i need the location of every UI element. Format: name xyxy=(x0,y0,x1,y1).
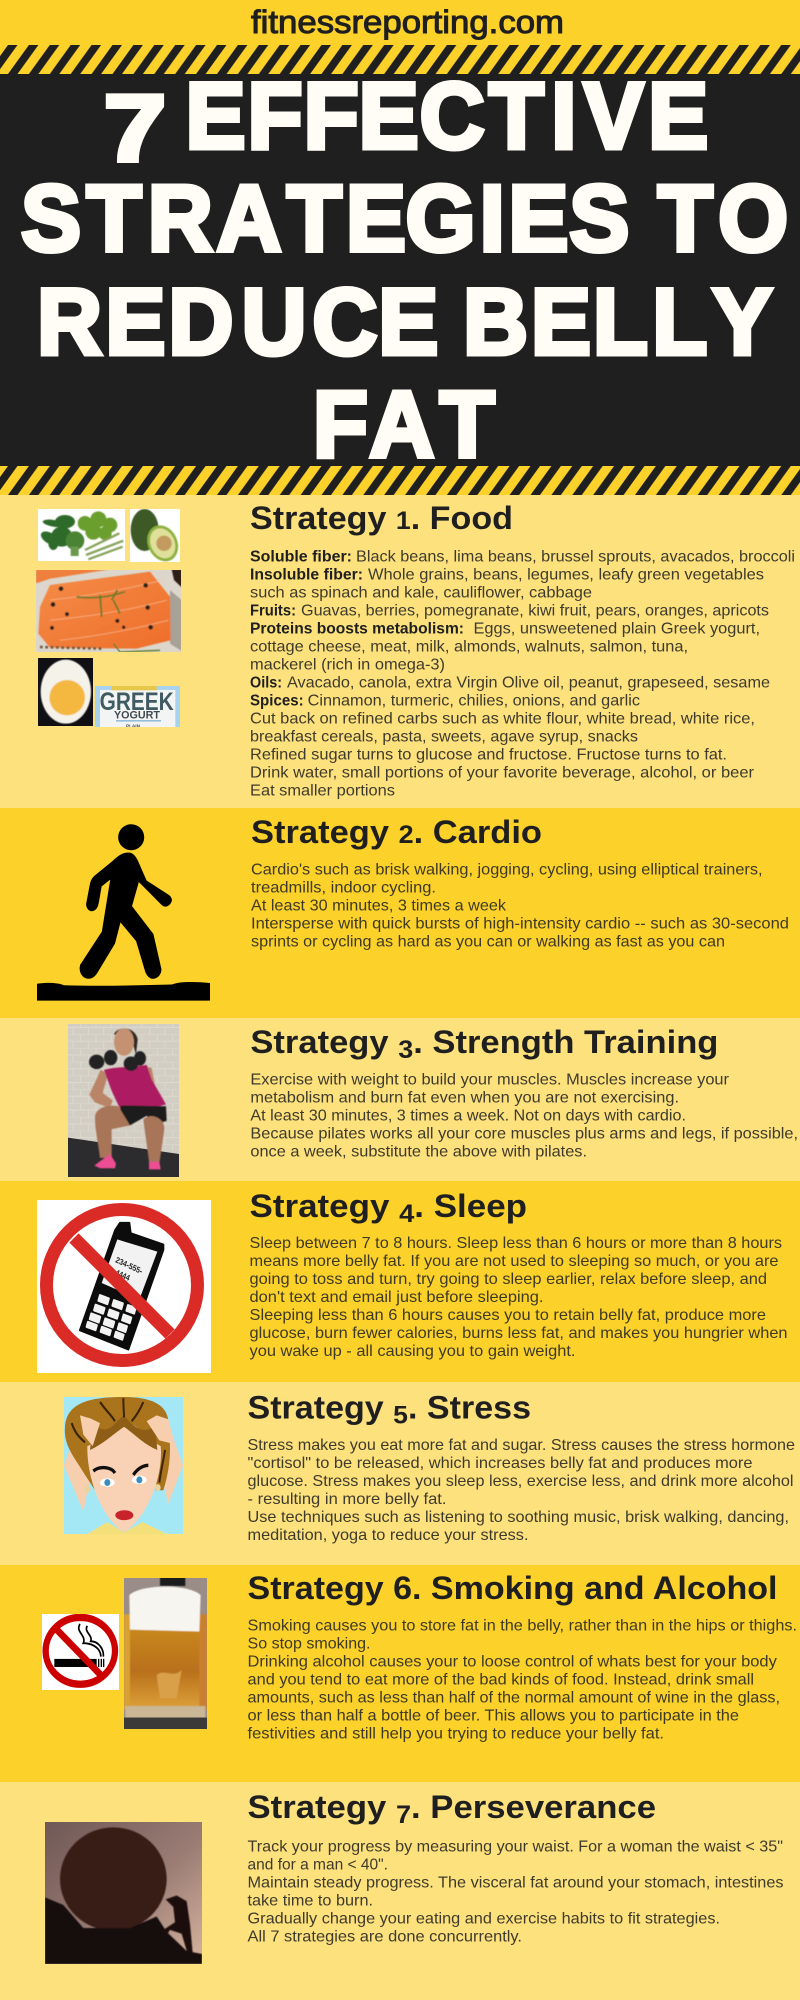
text: perseverance advice: and for a man < 40". xyxy=(248,1856,388,1873)
text: food list: Cut back on refined carbs such as white flour, white bread, white rice, xyxy=(250,711,755,728)
heading: strategy 7: . Perseverance xyxy=(411,1789,656,1825)
text: sleep advice: going to toss and turn, try going to sleep earlier, relax before sleep, and xyxy=(250,1271,767,1288)
title: 7 xyxy=(104,76,166,180)
heading: strategy 5: . Stress xyxy=(408,1390,531,1426)
heading: strategy 6: Strategy 6. Smoking and Alcohol xyxy=(248,1570,778,1606)
photo: avocado xyxy=(130,509,180,562)
text: food list: Avacado, canola, extra Virgin Olive oil, peanut, grapeseed, sesame xyxy=(287,675,770,692)
text: sleep advice: you wake up - all causing you to gain weight. xyxy=(250,1343,576,1360)
text: sleep advice xyxy=(250,1235,788,1360)
icon: no phone sign xyxy=(37,1200,211,1373)
icon: walking figure on ground xyxy=(37,824,210,1001)
heading: strategy 4: Strategy xyxy=(250,1188,378,1224)
text: sleep advice: Sleeping less than 6 hours causes you to retain belly fat, produce more xyxy=(250,1307,766,1324)
icon: phone xyxy=(79,1222,164,1350)
heading: strategy 4: 4 xyxy=(399,1200,414,1228)
title: STRATEGIES TO xyxy=(21,167,788,271)
panel: strategy 5 stress xyxy=(0,1382,800,1565)
text: cardio advice: sprints or cycling as hard as you can or walking as fast as you can xyxy=(251,934,725,951)
heading: strategy 5: 5 xyxy=(393,1402,408,1430)
heading: strategy 1: Strategy 1. Food xyxy=(250,500,513,536)
panel: strategy 1 food xyxy=(0,495,800,808)
text: sleep advice: means more belly fat. If you are not used to sleeping so much, or you are xyxy=(250,1253,779,1270)
heading: strategy 2: Strategy 2. Cardio xyxy=(251,814,542,850)
text: smoking and alcohol advice: festivities and still help you trying to reduce your belly fat. xyxy=(248,1726,664,1743)
text: cardio advice: treadmills, indoor cycling. xyxy=(251,880,436,897)
text: stress advice: "cortisol" to be released, which increases belly fat and produces more xyxy=(248,1455,753,1472)
text: food list: Guavas, berries, pomegranate, kiwi fruit, pears, oranges, apricots xyxy=(301,603,769,620)
text: food list: Black beans, lima beans, brussel sprouts, avacados, broccoli xyxy=(356,549,795,566)
text: food list: Oils: xyxy=(250,675,282,692)
title: EFFECTIVE xyxy=(186,64,708,168)
text: food list: Insoluble fiber: xyxy=(250,567,363,584)
text: food list xyxy=(250,549,795,800)
text: strength advice: metabolism and burn fat even when you are not exercising. xyxy=(250,1090,679,1107)
text: food list: Refined sugar turns to glucose and fructose. Fructose turns to fat. xyxy=(250,747,727,764)
text: perseverance advice: Track your progress by measuring your waist. For a woman the waist < 35" xyxy=(248,1838,783,1855)
text: perseverance advice: Maintain steady progress. The visceral fat around your stomach, intestines xyxy=(248,1874,784,1891)
text: stress advice: Use techniques such as listening to soothing music, brisk walking, dancing, xyxy=(248,1509,789,1526)
text: strength advice: once a week, substitute the above with pilates. xyxy=(250,1144,587,1161)
text: strength advice: At least 30 minutes, 3 times a week. Not on days with cardio. xyxy=(250,1108,686,1125)
site name: fitnessreporting.com xyxy=(251,4,564,40)
photo: greek yogurt label: YOGURT xyxy=(114,710,161,722)
text: food list: such as spinach and kale, cauliflower, cabbage xyxy=(250,585,592,602)
text: smoking and alcohol advice xyxy=(248,1618,797,1743)
text: food list: mackerel (rich in omega-3) xyxy=(250,657,445,674)
text: smoking and alcohol advice: Smoking causes you to store fat in the belly, rather than in the hips or thighs. xyxy=(248,1618,797,1635)
icon: phone: 4444 xyxy=(114,1268,132,1283)
panel: strategy 3 strength training xyxy=(0,1018,800,1181)
heading: strategy 5: Strategy xyxy=(248,1390,376,1426)
photo: mug of beer xyxy=(124,1578,207,1729)
text: food list: Fruits: xyxy=(250,603,296,620)
text: strength advice: Because pilates works all your core muscles plus arms and legs, if possible, xyxy=(250,1126,798,1143)
heading: strategy 3: . Strength Training xyxy=(413,1024,718,1060)
text: smoking and alcohol advice: and you tend to eat more of the bad kinds of food. Instead, drink small xyxy=(248,1672,754,1689)
heading: strategy 7: Strategy xyxy=(248,1789,376,1825)
title: REDUCE BELLY xyxy=(37,270,772,374)
text: cardio advice: Intersperse with quick bursts of high-intensity cardio -- such as 30-second xyxy=(251,916,789,933)
photo: greek yogurt label: PLAIN xyxy=(126,723,141,728)
photo: leafy greens xyxy=(38,509,125,561)
panel: strategy 6 smoking and alcohol xyxy=(0,1565,800,1782)
text: strength advice xyxy=(250,1072,798,1161)
title: FAT xyxy=(313,373,495,477)
text: perseverance advice xyxy=(248,1838,784,1945)
text: cardio advice xyxy=(251,862,789,951)
text: food list: Eat smaller portions xyxy=(250,783,395,800)
text: smoking and alcohol advice: amounts, such as less than half of the normal amount of wine in the glass, xyxy=(248,1690,780,1707)
text: food list: Soluble fiber: xyxy=(250,549,352,566)
text: sleep advice: Sleep between 7 to 8 hours. Sleep less than 6 hours or more than 8 hours xyxy=(250,1235,782,1252)
text: stress advice: Stress makes you eat more fat and sugar. Stress causes the stress hormone xyxy=(248,1437,795,1454)
text: smoking and alcohol advice: So stop smoking. xyxy=(248,1636,370,1653)
header band xyxy=(0,0,800,45)
heading: strategy 3: 3 xyxy=(398,1036,413,1064)
illustration: stressed woman xyxy=(64,1397,183,1534)
text: food list: Whole grains, beans, legumes, leafy green vegetables xyxy=(368,567,764,584)
title banner xyxy=(0,45,800,495)
heading: strategy 3: Strategy xyxy=(250,1024,378,1060)
icon: phone: 234-555- xyxy=(114,1255,144,1276)
text: perseverance advice: All 7 strategies are done concurrently. xyxy=(248,1928,522,1945)
text: stress advice: meditation, yoga to reduce your stress. xyxy=(248,1527,528,1544)
photo: greek yogurt label xyxy=(95,686,180,728)
photo: man pushing boulder xyxy=(45,1822,202,1964)
text: smoking and alcohol advice: Drinking alcohol causes your to loose control of whats best for your body xyxy=(248,1654,777,1671)
text: perseverance advice: Gradually change your eating and exercise habits to fit strategies. xyxy=(248,1910,720,1927)
text: food list: Drink water, small portions of your favorite beverage, alcohol, or beer xyxy=(250,765,755,782)
text: stress advice: glucose. Stress makes you sleep less, exercise less, and drink more alcohol xyxy=(248,1473,794,1490)
text: smoking and alcohol advice: or less than half a bottle of beer. This allows you to participate in the xyxy=(248,1708,739,1725)
text: stress advice xyxy=(248,1437,795,1544)
text: food list: Spices: xyxy=(250,693,304,710)
text: food list: Eggs, unsweetened plain Greek yogurt, xyxy=(474,621,760,638)
text: food list: breakfast cereals, pasta, sweets, agave syrup, snacks xyxy=(250,729,638,746)
text: sleep advice: don't text and email just before sleeping. xyxy=(250,1289,544,1306)
icon: no smoking sign xyxy=(42,1614,119,1690)
text: sleep advice: glucose, burn fewer calories, burns less fat, and makes you hungrier when xyxy=(250,1325,788,1342)
text: food list: Cinnamon, turmeric, chilies, onions, and garlic xyxy=(308,693,640,710)
text: stress advice: - resulting in more belly fat. xyxy=(248,1491,446,1508)
text: food list: Proteins boosts metabolism: xyxy=(250,621,464,638)
panel: strategy 7 perseverance xyxy=(0,1782,800,2000)
title xyxy=(21,64,788,477)
text: strength advice: Exercise with weight to build your muscles. Muscles increase your xyxy=(250,1072,730,1089)
panel: strategy 4 sleep xyxy=(0,1181,800,1382)
text: food list: cottage cheese, meat, milk, almonds, walnuts, salmon, tuna, xyxy=(250,639,688,656)
panel: strategy 2 cardio xyxy=(0,808,800,1018)
text: cardio advice: At least 30 minutes, 3 times a week xyxy=(251,898,507,915)
photo: boiled egg xyxy=(38,658,93,726)
heading: strategy 7: 7 xyxy=(396,1801,411,1829)
text: perseverance advice: take time to burn. xyxy=(248,1892,373,1909)
text: cardio advice: Cardio's such as brisk walking, jogging, cycling, using elliptical trainers, xyxy=(251,862,762,879)
photo: salmon xyxy=(36,570,181,652)
heading: strategy 4: . Sleep xyxy=(414,1188,527,1224)
photo: woman squatting with dumbbells xyxy=(68,1024,179,1177)
